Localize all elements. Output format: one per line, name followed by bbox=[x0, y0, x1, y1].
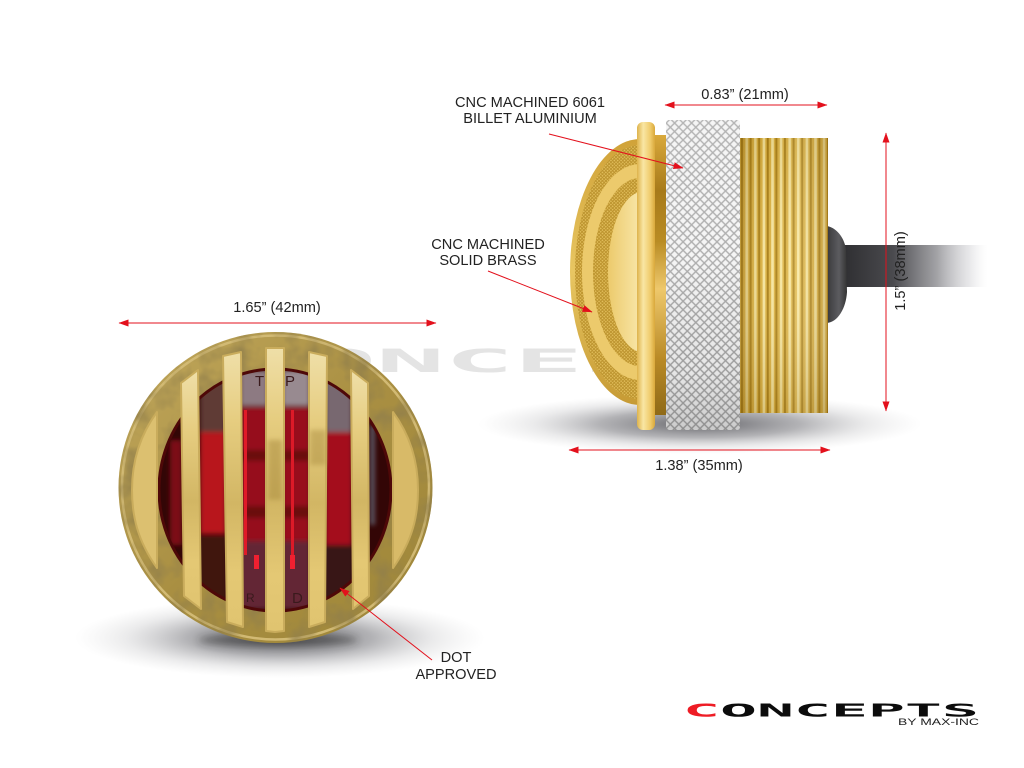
brass flange bbox=[637, 122, 655, 430]
brand logo: BY MAX-INC bbox=[898, 717, 979, 728]
brand logo: C ONCEPTS bbox=[683, 702, 979, 722]
dimension: height: 1.5” (38mm) bbox=[893, 231, 909, 311]
callout: DOT approved bbox=[340, 588, 497, 683]
red lens: P bbox=[285, 373, 295, 390]
dimension: front width: 1.65” (42mm) bbox=[233, 300, 321, 316]
watermark logo: CONCEPTS bbox=[238, 342, 790, 380]
callout: billet aluminium: CNC MACHINED 6061 bbox=[455, 95, 605, 111]
threaded body bbox=[740, 138, 828, 413]
red lens: R bbox=[246, 591, 255, 605]
callout: billet aluminium: BILLET ALUMINIUM bbox=[463, 111, 597, 127]
ground shadow: front lamp bbox=[75, 598, 485, 678]
ground shadow: side view bbox=[478, 394, 922, 454]
lens edge bbox=[159, 369, 391, 611]
grille bars bbox=[132, 348, 418, 632]
watermark logo: BY MAX-INC bbox=[635, 374, 785, 390]
brass neck bbox=[654, 135, 668, 415]
domed brass visor bbox=[570, 139, 637, 405]
dimension: depth: 1.38” (35mm) bbox=[655, 458, 743, 474]
watermark logo bbox=[238, 342, 790, 390]
callout: solid brass: CNC MACHINED bbox=[431, 237, 545, 253]
dimension: ring width: 0.83” (21mm) bbox=[701, 87, 789, 103]
front view lamp bbox=[118, 332, 432, 643]
knurled aluminium ring bbox=[666, 120, 740, 430]
brand logo bbox=[683, 702, 979, 728]
side view lamp bbox=[570, 120, 988, 430]
callout: DOT approved: DOT bbox=[441, 650, 471, 666]
red lens: D bbox=[292, 590, 303, 607]
callout: solid brass bbox=[431, 237, 592, 312]
callout: solid brass: SOLID BRASS bbox=[439, 253, 537, 269]
callout: DOT approved: APPROVED bbox=[415, 667, 497, 683]
lamp rim bbox=[118, 332, 432, 643]
cable bbox=[842, 245, 988, 287]
lens lettering: T bbox=[255, 373, 264, 390]
red lens bbox=[155, 365, 395, 615]
callout: billet aluminium bbox=[455, 95, 683, 168]
rubber grommet bbox=[827, 226, 847, 323]
